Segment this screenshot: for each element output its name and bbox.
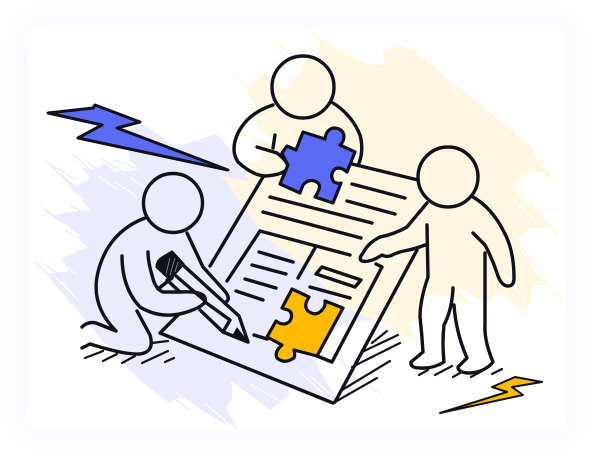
right arm [473, 197, 514, 286]
ground marks [85, 351, 174, 363]
puzzle piece: yellow [267, 289, 343, 361]
head [272, 56, 334, 118]
left arm [234, 105, 288, 176]
paper document [160, 164, 418, 403]
brush stroke: lavender [36, 124, 380, 429]
pointing arm [360, 203, 427, 261]
right leg [454, 253, 493, 373]
pencil [157, 252, 248, 342]
brush stroke: cream [222, 30, 563, 342]
head [144, 174, 202, 232]
lightning bolt: blue [48, 105, 228, 170]
paper edges [160, 164, 418, 403]
knee and lower leg [82, 311, 151, 354]
head [418, 147, 478, 207]
card background [28, 27, 567, 431]
right shoulder [333, 103, 362, 163]
left side and leg [411, 225, 453, 368]
puzzle piece: blue [280, 128, 355, 203]
back and foot [82, 218, 145, 331]
reaching arm [187, 233, 228, 302]
figure: top, holding puzzle [234, 56, 362, 176]
bent arm [122, 252, 205, 315]
page fan lines [335, 331, 400, 402]
figure: right, pointing [360, 147, 514, 377]
figure: left, drawing with pencil [82, 174, 248, 363]
text lines [236, 184, 405, 339]
ground marks [419, 366, 502, 377]
lightning bolt: yellow [440, 377, 542, 413]
